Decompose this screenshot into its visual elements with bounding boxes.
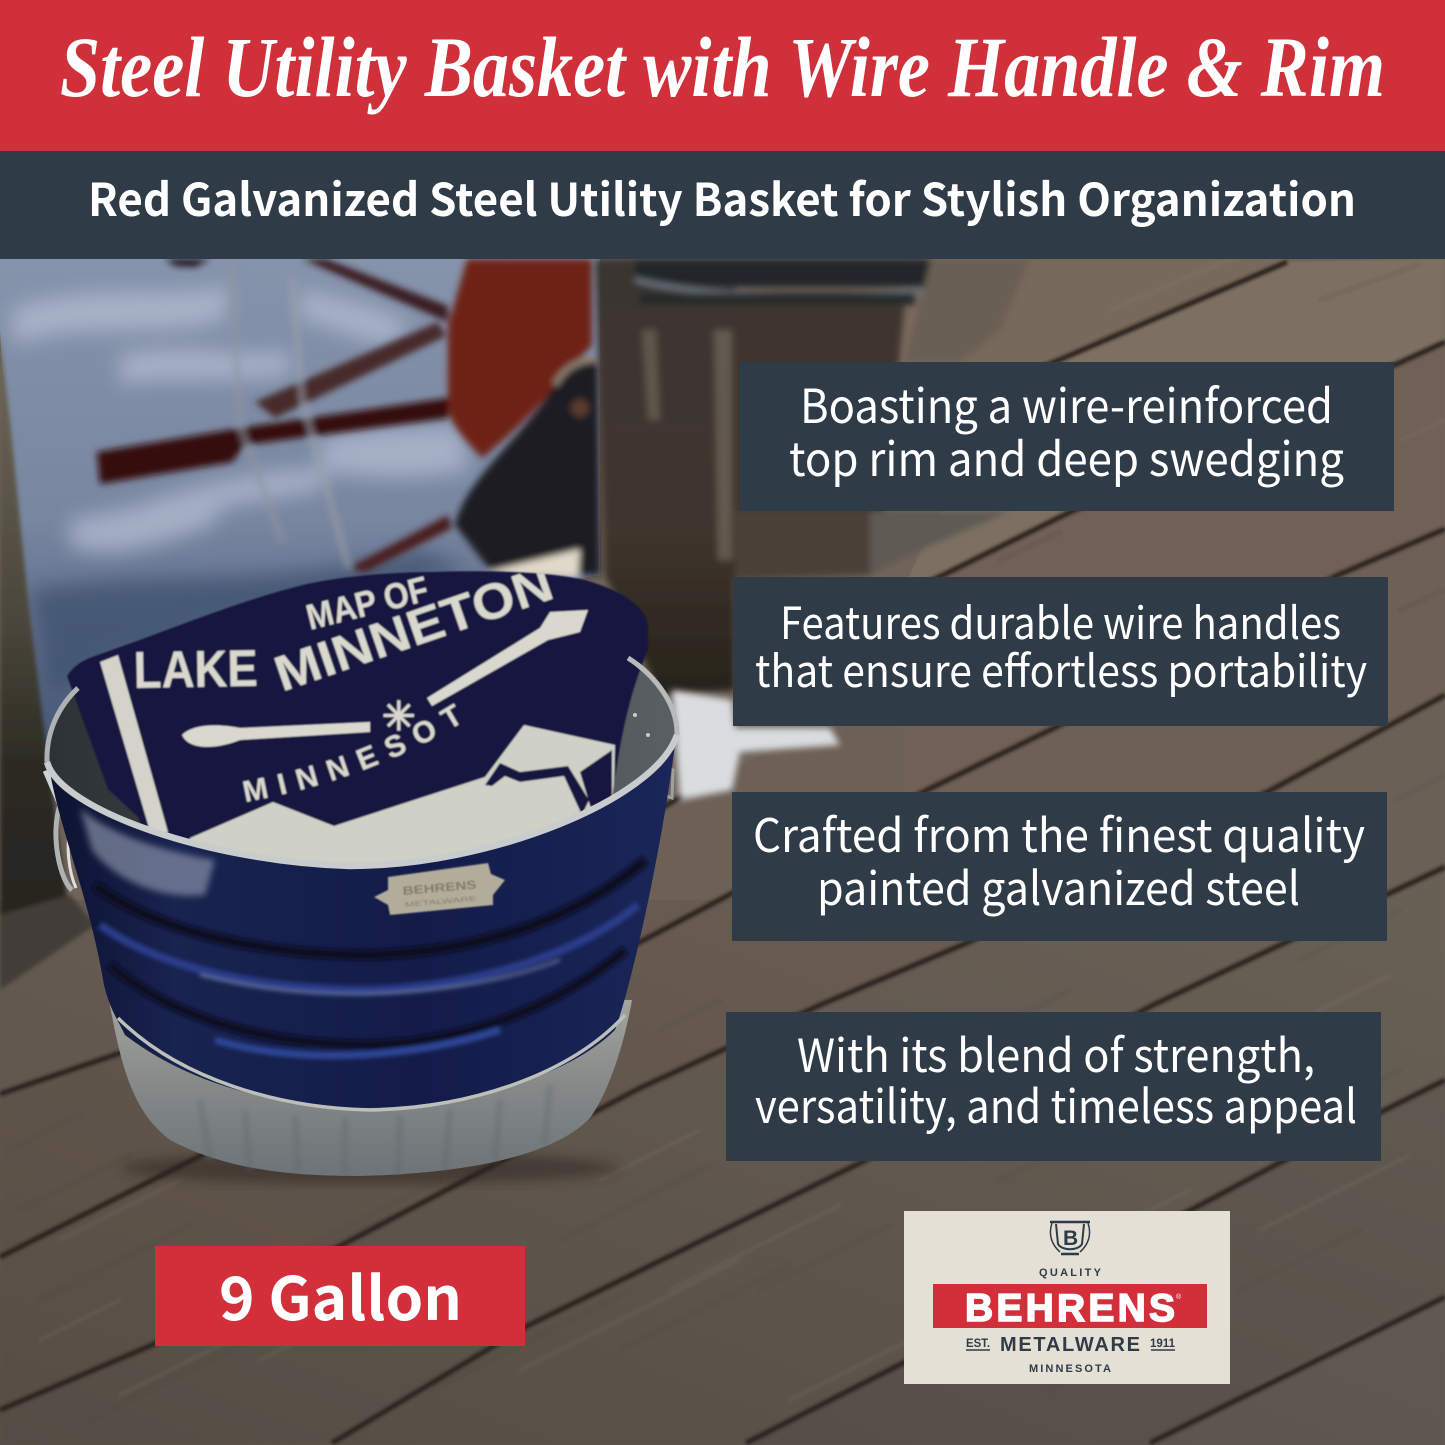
metalware: METALWARE [1000,1334,1140,1356]
rim [47,658,677,866]
lake water [0,259,600,780]
subtitle: Red Galvanized Steel Utility Basket for Stylish Organization [88,164,1356,229]
left wire handle [47,770,76,890]
wheel spokes [97,398,448,484]
left dock post [0,335,95,990]
capacity badge [155,1246,525,1346]
blanket border stripe [100,655,168,838]
feature box 1: top rim and deep swedging [789,421,1344,490]
feature box 4: With its blend of strength, [797,1020,1315,1086]
name plate [374,863,505,915]
swedge highlights [95,860,645,1055]
feature box 2: that ensure effortless portability [755,636,1367,700]
Behrens logo [904,1211,1230,1384]
year: 1911 [1150,1336,1175,1350]
white boat patch behind the basket [672,690,840,800]
basket [42,570,680,1176]
galvanized seam [118,1015,625,1110]
interior [47,658,677,866]
right wire handle [660,765,673,798]
ropes [231,259,283,542]
feature box 4 [726,1012,1381,1161]
red brand band [933,1284,1207,1328]
lake outline [485,763,589,815]
name plate: BEHRENS [402,878,477,898]
blanket cream lower area [190,725,615,880]
blanket: LAKE [133,640,258,700]
star: ✳ [382,695,416,739]
feature box 1: Boasting a wire-reinforced [800,368,1333,437]
capacity badge: 9 Gallon [219,1251,462,1338]
feature box 3: painted galvanized steel [817,853,1300,919]
galvanized base [108,995,632,1176]
paddle right [427,610,588,706]
wheel body [448,259,592,458]
quality: QUALITY [1039,1267,1102,1279]
feature box 4: versatility, and timeless appeal [755,1071,1357,1137]
interior rivets [633,713,650,737]
feature box 1 [739,362,1394,511]
feature box 3: Crafted from the finest quality [753,800,1365,866]
cream patch [486,549,580,578]
icon: bucket: B [1063,1227,1078,1250]
paddle left [182,722,370,747]
blanket text: MAP OF [302,568,432,638]
name plate: METALWARE [405,896,477,909]
subtitle banner [0,151,1445,259]
body reflection [80,808,215,896]
feature box 2: Features durable wire handles [780,588,1341,652]
mooring cleat [455,360,600,575]
brand name: BEHRENS [965,1287,1175,1330]
minnesota: MINNESOTA [1029,1363,1111,1375]
blanket: MINNETON [267,555,560,702]
icon: bucket [1050,1222,1090,1254]
feature box 2 [733,577,1388,726]
navy body [50,745,675,1108]
dock post and bucket behind [595,259,1030,695]
title banner [0,0,1445,151]
registered mark: ® [1176,1293,1182,1301]
established: EST. [966,1336,990,1350]
blanket [66,570,648,863]
basket shadow [120,1152,620,1184]
red paddle wheel in background [97,259,600,578]
blanket: MINNESOT [242,702,460,803]
feature box 3 [732,792,1387,941]
